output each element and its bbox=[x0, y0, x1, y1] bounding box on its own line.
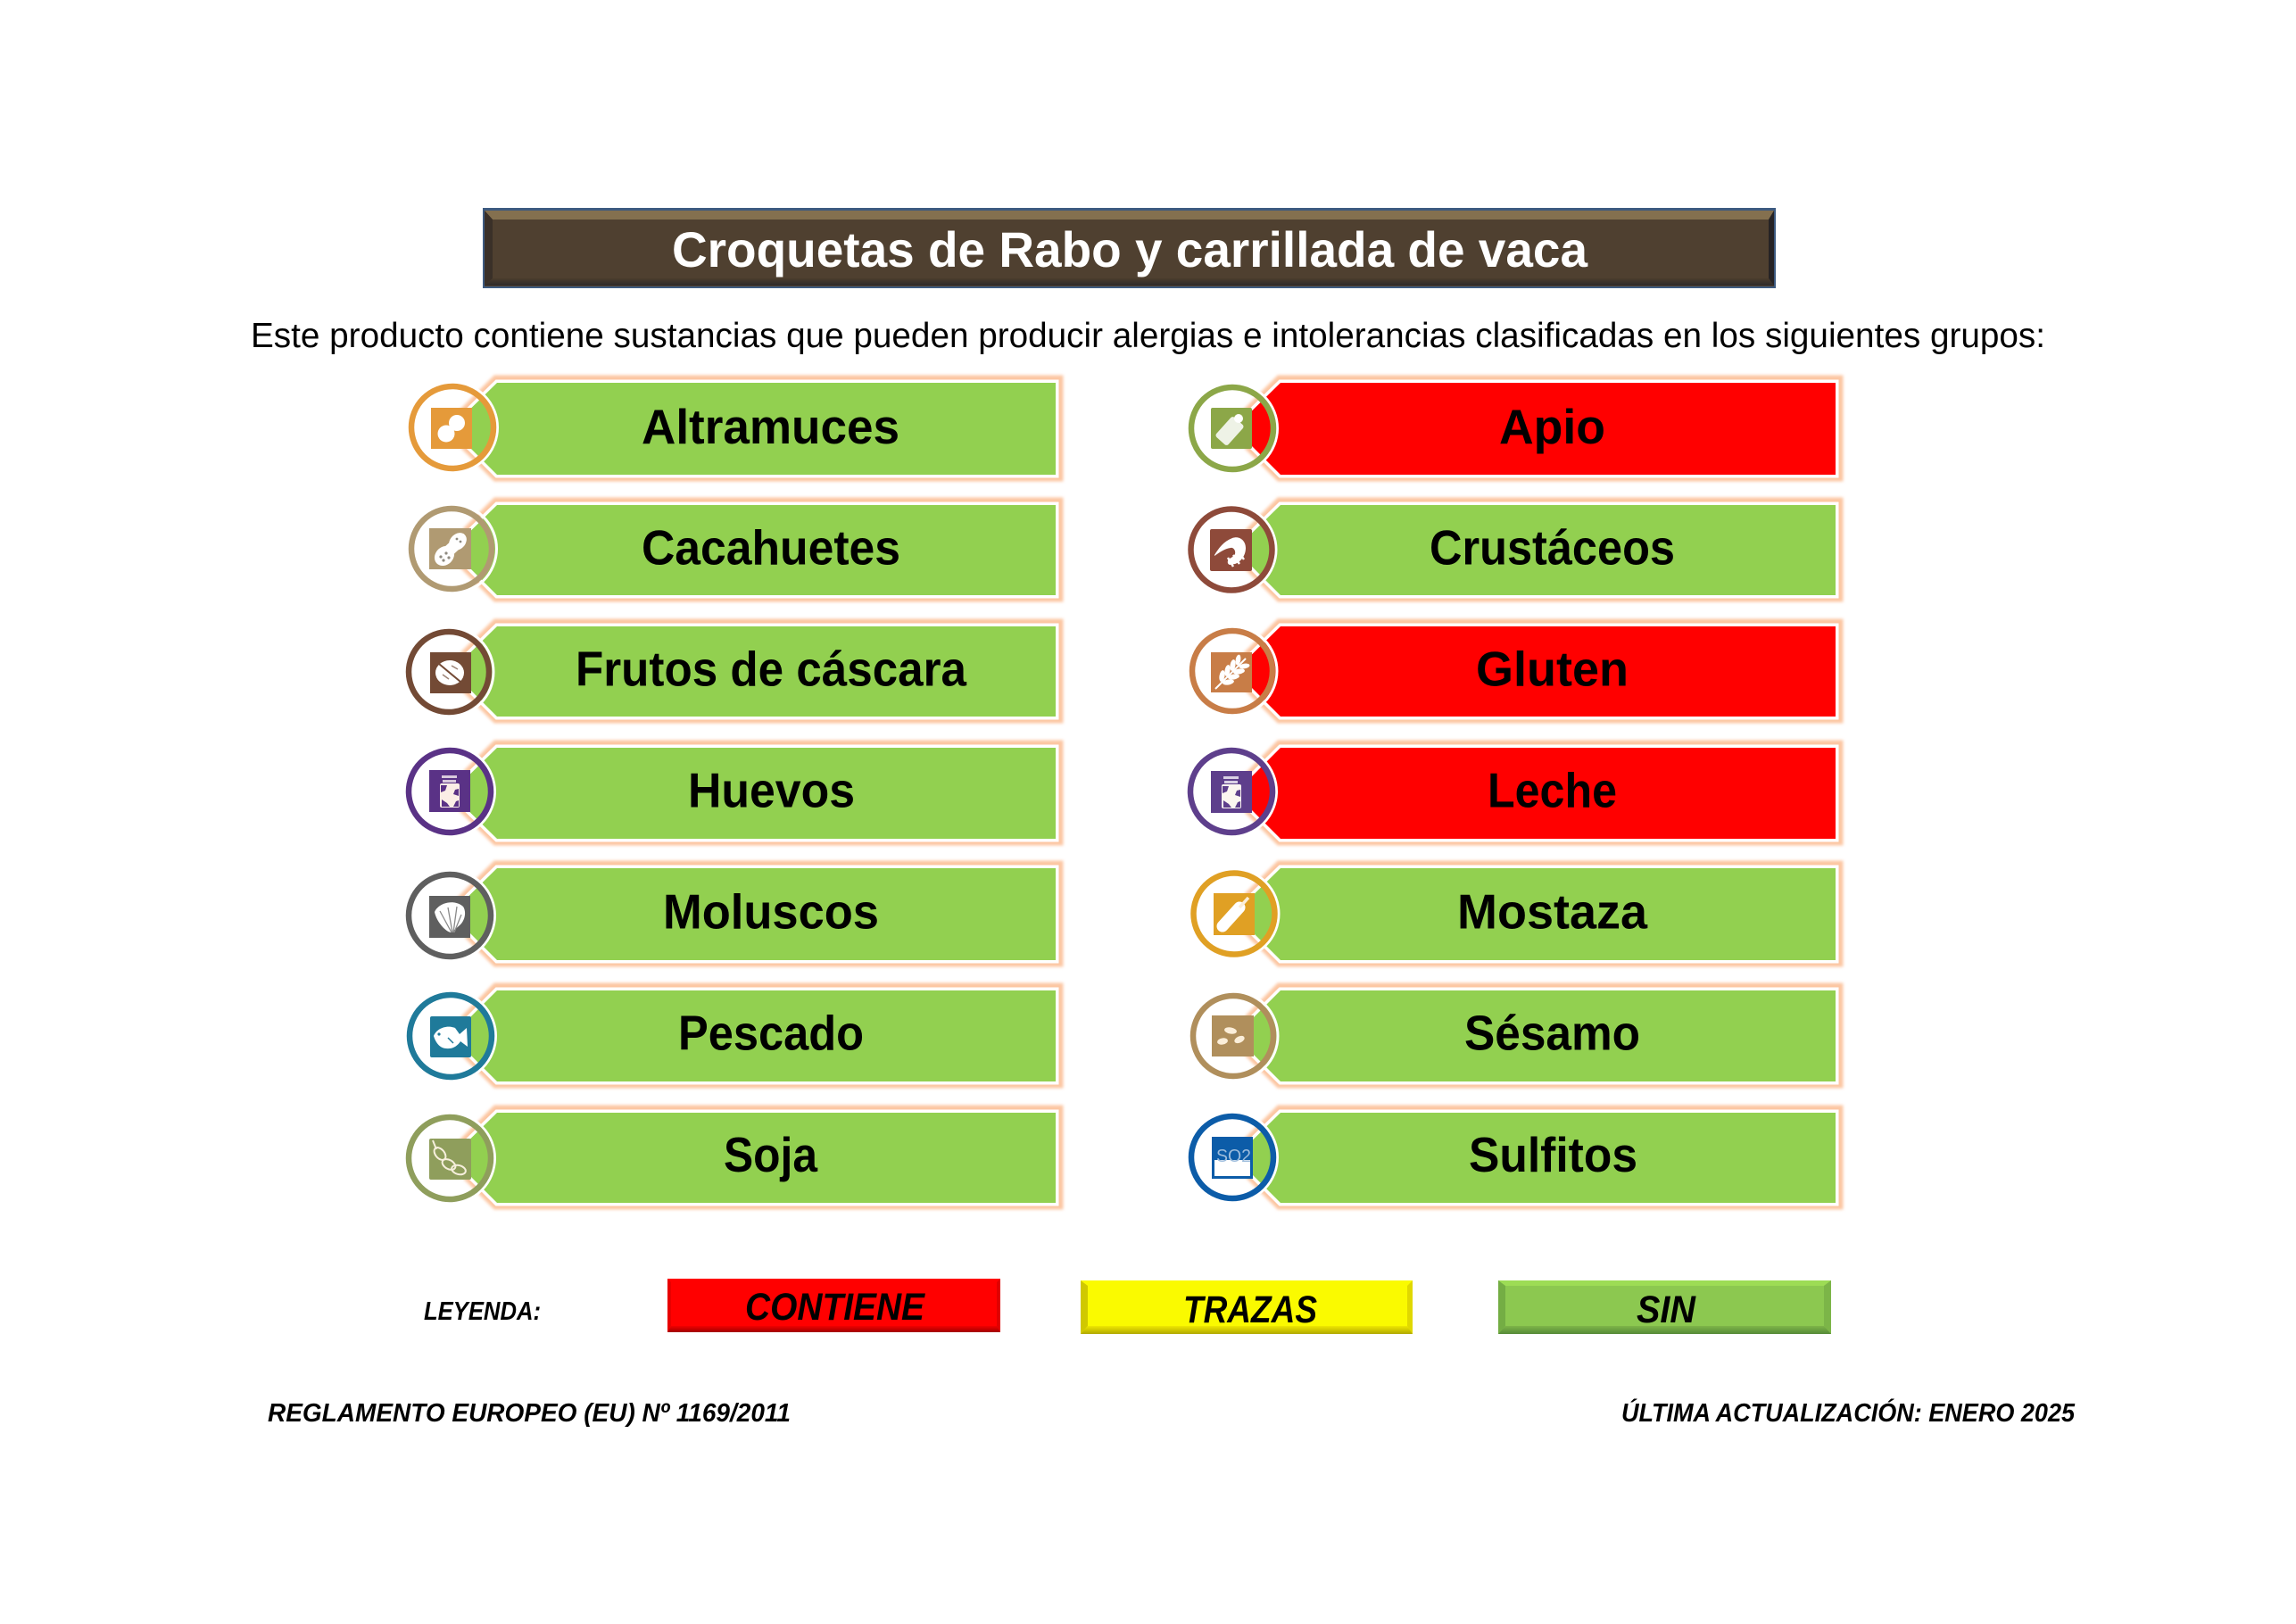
label: Frutos de cáscara bbox=[576, 641, 966, 696]
row: Leche bbox=[1187, 746, 1836, 839]
row: Sésamo bbox=[1189, 990, 1836, 1081]
row: Gluten bbox=[1188, 626, 1836, 717]
icon: sulfites bbox=[1187, 1112, 1278, 1203]
row: Crustáceos bbox=[1187, 504, 1836, 595]
footer: last update: ÚLTIMA ACTUALIZACIÓN: ENERO 2025 bbox=[1621, 1397, 2076, 1428]
row: Pescado bbox=[405, 990, 1057, 1081]
icon: celery bbox=[1187, 384, 1278, 473]
icon: wheat bbox=[1188, 626, 1277, 716]
label: Soja bbox=[724, 1127, 817, 1182]
label: Huevos bbox=[688, 762, 855, 817]
label: Moluscos bbox=[663, 883, 879, 939]
legend: contiene bbox=[667, 1279, 1000, 1332]
legend: trazas: TRAZAS bbox=[1183, 1288, 1317, 1331]
row: Moluscos bbox=[405, 867, 1057, 960]
icon: fish bbox=[405, 990, 496, 1081]
icon: sesame bbox=[1189, 991, 1278, 1081]
row: Apio bbox=[1187, 382, 1836, 475]
icon: shrimp bbox=[1187, 505, 1276, 594]
label: Mostaza bbox=[1457, 883, 1647, 939]
label: Sésamo bbox=[1464, 1005, 1640, 1060]
title bar bbox=[483, 208, 1776, 288]
row: Altramuces bbox=[407, 382, 1057, 475]
icon: sulfites: SO2 bbox=[1216, 1147, 1251, 1166]
row: Sulfitos bbox=[1187, 1112, 1836, 1203]
label: Gluten bbox=[1476, 641, 1629, 696]
label: Apio bbox=[1499, 399, 1605, 454]
row: Soja bbox=[405, 1112, 1057, 1203]
icon: shell bbox=[405, 871, 494, 960]
row: Frutos de cáscara bbox=[404, 626, 1057, 717]
label: Leche bbox=[1488, 762, 1617, 817]
label: Sulfitos bbox=[1469, 1127, 1637, 1182]
intro text: Este producto contiene sustancias que pueden producir alergias e intolerancias clasificadas en los siguientes grupos: bbox=[251, 317, 2045, 355]
row: Huevos bbox=[405, 746, 1057, 839]
label: Altramuces bbox=[642, 399, 899, 454]
row: Cacahuetes bbox=[407, 503, 1057, 595]
icon: soy bbox=[405, 1114, 494, 1203]
legend heading: LEYENDA: bbox=[424, 1297, 541, 1326]
legend: trazas bbox=[1081, 1280, 1413, 1334]
legend: contiene: CONTIENE bbox=[745, 1286, 925, 1329]
icon: egg jar bbox=[405, 746, 494, 837]
icon: mustard bbox=[1189, 869, 1279, 958]
icon: walnut bbox=[404, 627, 493, 717]
icon: milk jar bbox=[1187, 746, 1276, 837]
label: Cacahuetes bbox=[642, 519, 900, 575]
title bar: Croquetas de Rabo y carrillada de vaca bbox=[672, 221, 1588, 278]
label: Crustáceos bbox=[1430, 519, 1675, 575]
icon: lupin bbox=[407, 382, 498, 473]
row: Mostaza bbox=[1189, 867, 1836, 960]
icon: peanut bbox=[407, 503, 496, 594]
legend: sin bbox=[1498, 1280, 1831, 1334]
legend: sin: SIN bbox=[1637, 1288, 1696, 1331]
footer: regulation: REGLAMENTO EUROPEO (EU) Nº 1169/2011 bbox=[268, 1399, 791, 1428]
label: Pescado bbox=[678, 1005, 864, 1060]
